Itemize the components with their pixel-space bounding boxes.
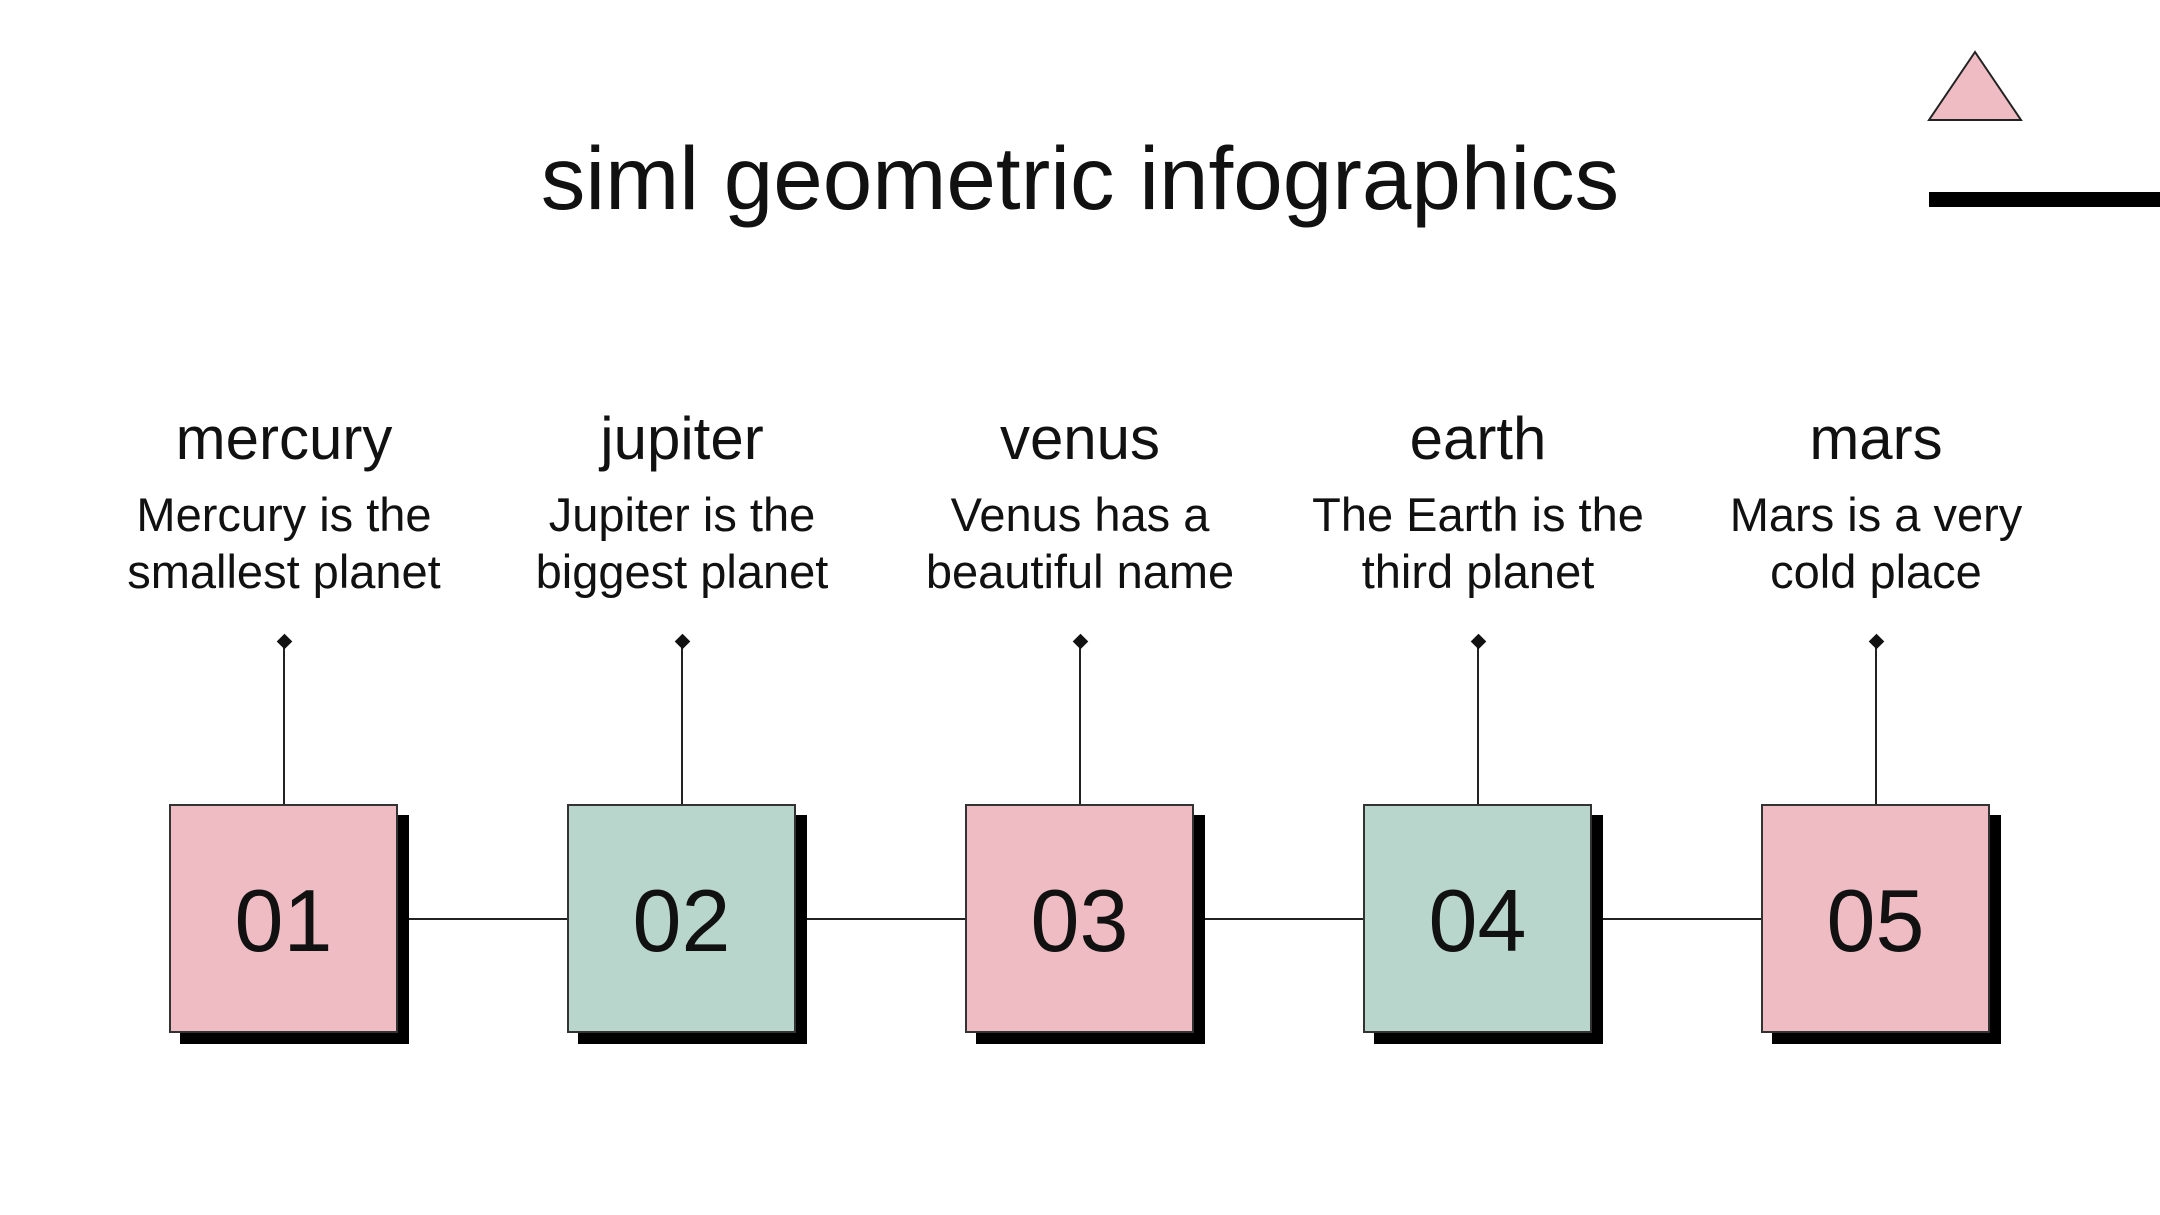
heading: venus (926, 405, 1234, 598)
step 4 (1312, 405, 1644, 1044)
heading: mercury: mercury (176, 405, 392, 472)
step 5 (1730, 405, 2022, 1044)
heading: mars: mars (1809, 405, 1943, 472)
box 03: 03 (1031, 870, 1128, 970)
step 3 (926, 405, 1234, 1044)
box 01: 01 (235, 870, 332, 970)
box 03 (965, 804, 1194, 1033)
heading: jupiter: Jupiter is the biggest planet (536, 488, 828, 598)
diamond (675, 634, 690, 649)
diamond (1869, 634, 1884, 649)
heading: mars (1730, 405, 2022, 598)
title: siml geometric infographics (541, 128, 1619, 228)
heading: earth: earth (1410, 405, 1546, 472)
heading: earth: The Earth is the third planet (1312, 488, 1644, 598)
connector line (284, 918, 1876, 920)
icon: pink triangle (1927, 50, 2023, 121)
stem (1477, 642, 1479, 805)
box 02 (567, 804, 796, 1033)
box 04 (1363, 804, 1592, 1033)
black bar (1929, 192, 2160, 207)
heading: mercury: Mercury is the smallest planet (127, 488, 441, 598)
stem (681, 642, 683, 805)
box 02: 02 (633, 870, 730, 970)
heading: earth (1312, 405, 1644, 598)
box 01 (169, 804, 398, 1033)
box 04: 04 (1429, 870, 1526, 970)
stem (283, 642, 285, 805)
stem (1875, 642, 1877, 805)
heading: venus: Venus has a beautiful name (926, 488, 1234, 598)
heading: venus: venus (1000, 405, 1160, 472)
diamond (1471, 634, 1486, 649)
step 2 (536, 405, 828, 1044)
heading: mercury (127, 405, 441, 598)
step 1 (127, 405, 441, 1044)
stem (1079, 642, 1081, 805)
diamond (1073, 634, 1088, 649)
heading: jupiter: jupiter (600, 405, 764, 472)
heading: mars: Mars is a very cold place (1730, 488, 2022, 598)
heading: jupiter (536, 405, 828, 598)
box 05: 05 (1827, 870, 1924, 970)
diamond (277, 634, 292, 649)
box 05 (1761, 804, 1990, 1033)
